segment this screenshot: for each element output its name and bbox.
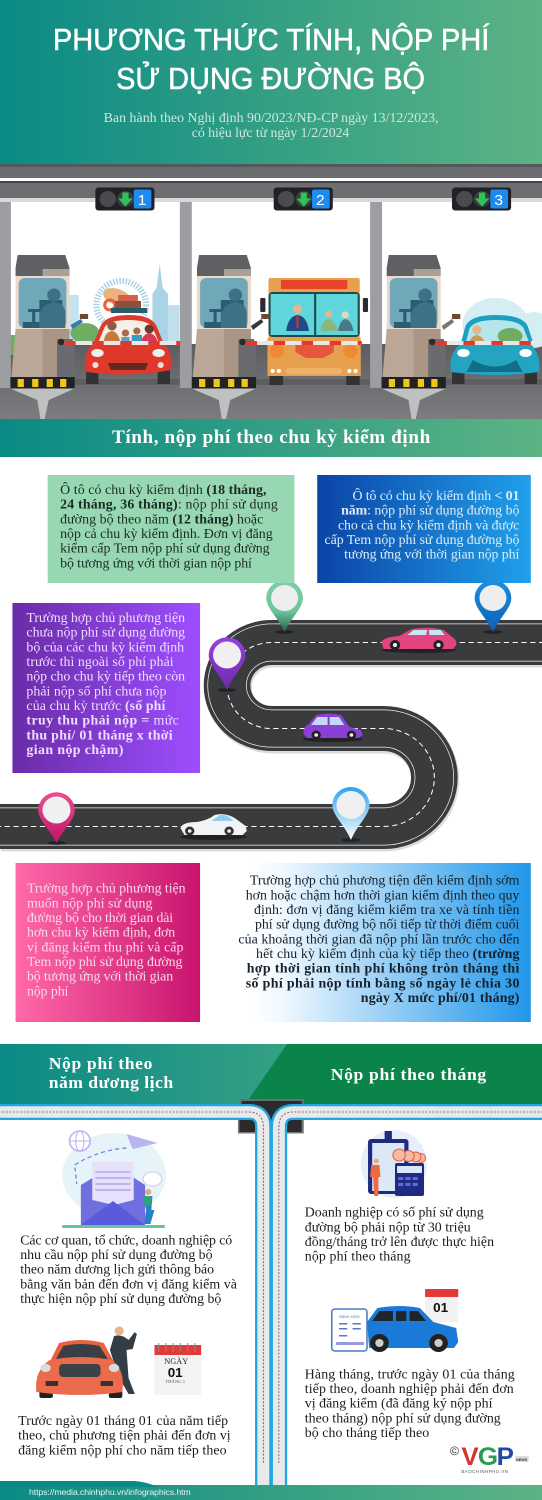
logo: VGP: © [450,1444,459,1458]
panel: pink box: Trường hợp chủ phương tiện [27,881,186,896]
panel: purple arrears box: phải nộp số phí chưa nộp [26,684,167,698]
heading: monthly: Nộp phí theo tháng [331,1065,487,1084]
city background [10,264,542,355]
icon: calendar 1 January: 01 [168,1365,183,1380]
logo: VGP: G [478,1443,498,1471]
panel: early or late inspection box: phí sử dụng đường bộ nối tiếp từ thời điểm cuối [255,917,520,932]
traffic light 3: 3 [494,192,503,209]
panel: purple arrears box: trước thì ngoài số phí phải [26,654,174,669]
panel: green cycle box: nộp cả chu kỳ kiểm định. Đơn vị đăng [60,526,273,541]
red family car [85,285,171,384]
panel: early or late inspection box: hơn hoặc chậm hơn thời gian kiểm định theo quy [246,888,520,902]
panel: pink box: đường bộ cho thời gian dài [27,910,173,925]
panel: early or late inspection box: của khoảng thời gian đã nộp phí lần trước cho đến [238,932,520,946]
panel: early or late inspection box: ngày X mức phí/01 tháng) [361,990,519,1006]
teal car [450,315,539,384]
heading: calendar year [49,1054,174,1092]
icon: blue car with checklist and calendar [332,1289,458,1352]
panel: pink box: hơn chu kỳ kiểm định, đơn [27,925,175,940]
toll booth 2 [192,255,256,419]
panel: blue cycle box: cho cả chu kỳ kiểm định và được [338,518,519,532]
panel: purple arrears box: chưa nộp phí sử dụng đường [26,625,185,640]
panel: purple arrears box: nộp cho chu kỳ tiếp theo còn [26,669,185,684]
panel: early or late inspection box: hợp thời gian tính phí không tròn tháng thì [247,961,520,976]
panel: pink box: Tem nộp phí sử dụng đường [27,954,183,969]
panel: blue cycle box [317,475,531,583]
panel: pink box: bộ tương ứng với thời gian [27,969,173,984]
text: enterprise condition: Doanh nghiệp có số phí sử dụng [305,1205,484,1220]
subtitle: Ban hành theo Nghị định 90/2023/NĐ-CP ngày 13/12/2023, [104,110,439,125]
title: SỬ DỤNG ĐƯỜNG BỘ [116,61,425,96]
text: before 1 January: theo, chủ phương tiện phải đến đơn vị [18,1428,231,1443]
text: enterprise condition: đường bộ phải nộp từ 30 triệu [305,1220,471,1234]
logo: VGP: NEWS [516,1458,528,1462]
pin: light blue [332,787,370,842]
icon: envelope with paper plane [62,1131,166,1228]
section heading bar: Tính, nộp phí theo chu kỳ kiểm định [112,427,431,448]
text: monthly deadline: Hàng tháng, trước ngày 01 của tháng [305,1367,515,1381]
panel: purple arrears box: Trường hợp chủ phương tiện [26,610,185,625]
text: calendar year request: Các cơ quan, tổ chức, doanh nghiệp có [20,1233,232,1247]
columns [0,202,382,388]
text: before 1 January: Trước ngày 01 tháng 01 của năm tiếp [18,1413,228,1428]
panel: pink box [16,863,200,1022]
text: before 1 January [18,1413,231,1457]
text: calendar year request: nhu cầu nộp phí sử dụng đường bộ [20,1247,213,1262]
toll plaza illustration [0,164,542,419]
icon: blue car with checklist and calendar: 01 [433,1300,448,1315]
title: PHƯƠNG THỨC TÍNH, NỘP PHÍ [53,22,490,57]
panel: blue cycle box: cấp Tem nộp phí sử dụng đường bộ [324,532,520,547]
panel: pink box: muốn nộp phí sử dụng [27,896,153,910]
icon: orange car with man [36,1326,137,1398]
panel: pink box: nộp phí [27,984,69,998]
text: monthly deadline: theo tháng) nộp phí sử dụng đường [305,1411,501,1426]
text: enterprise condition [305,1205,494,1264]
panel: purple arrears box: gian nộp chậm) [26,742,123,758]
footer bar [0,1481,542,1500]
icon: calendar 1 January [154,1343,201,1395]
text: monthly deadline: tiếp theo, doanh nghiệp phải đến đơn [305,1381,514,1396]
road [0,642,542,828]
panel: blue cycle box: năm: nộp phí sử dụng đường bộ [341,503,520,518]
traffic light 2: 2 [316,192,325,209]
panel: blue cycle box: Ô tô có chu kỳ kiểm định < 01 [352,487,520,503]
panel: blue cycle box: tương ứng với thời gian nộp phí [344,547,520,562]
pin: purple [209,637,245,692]
logo: VGP: BAOCHINHPHU.VN [461,1469,508,1474]
panel: green cycle box [48,475,294,583]
subtitle [104,110,439,140]
central road divider [0,1099,542,1490]
traffic light 3 [452,188,511,210]
pin: blue [475,580,511,634]
text: calendar year request: theo năm dương lịch gửi thông báo [20,1262,214,1277]
traffic light 2 [274,188,333,210]
panel: purple arrears box: bộ của các chu kỳ kiểm định [26,640,184,654]
panel: green cycle box: đường bộ theo năm (12 tháng) hoặc [60,512,263,527]
panel: early or late inspection box: Trường hợp chủ phương tiện đến kiểm định sớm [250,873,520,888]
panel: early or late inspection box: định: đơn vị đăng kiểm kiểm tra xe và tính tiền [254,902,520,917]
text: monthly deadline: bộ cho tháng tiếp theo [305,1425,429,1440]
panel: early or late inspection box: số phí phải nộp tính bằng số ngày lẻ chia 30 [246,976,520,990]
panel: green cycle box: bộ tương ứng với thời gian nộp phí [60,556,252,570]
pink car [382,628,456,653]
pin: green [266,580,303,634]
header banner [0,0,542,164]
logo: VGP: V [461,1443,479,1471]
panel: pink box: vị đăng kiểm thu phí và cấp [27,940,184,954]
hands holding cards [70,314,460,330]
text: enterprise condition: đồng/tháng trở lên được thực hiện [305,1234,494,1249]
panel: purple arrears box: thu phí/ 01 tháng x thời [26,728,173,742]
barriers [64,341,539,345]
section heading bar [0,419,542,457]
toll booth 1 [10,255,75,419]
panel: early or late inspection box: hết chu kỳ kiểm định của kỳ tiếp theo (trường [256,946,520,962]
panel: green cycle box: Ô tô có chu kỳ kiểm định (18 tháng, [60,481,266,498]
text: enterprise condition: nộp phí theo tháng [305,1249,411,1264]
panel: purple arrears box [12,603,200,773]
icon: clipboard and calculator [361,1130,427,1198]
text: before 1 January: đăng kiểm nộp phí cho năm tiếp theo [18,1443,227,1457]
panel: green cycle box: kiểm cấp Tem nộp phí sử dụng đường [60,541,270,556]
panel: early or late inspection box [238,863,531,1022]
panel: purple arrears box: của chu kỳ trước (số phí [26,698,166,714]
text: monthly deadline [305,1367,515,1440]
white car [180,814,247,840]
text: calendar year request [20,1233,237,1306]
heading: calendar year: Nộp phí theo [49,1054,152,1073]
purple car [303,714,363,742]
logo: VGP: P [497,1443,514,1471]
panel: purple arrears box: truy thu phải nộp = mức [26,713,179,728]
orange bus [260,278,368,385]
panel: green cycle box: 24 tháng, 36 tháng): nộp phí sử dụng [60,497,278,513]
icon: calendar 1 January: THÁNG 1 [165,1379,186,1384]
title [53,22,490,96]
icon: calendar 1 January: NGÀY [164,1356,188,1366]
logo: VGP [450,1443,529,1474]
pin: pink [38,792,75,845]
section headers: calendar year and monthly [0,1044,542,1105]
text: calendar year request: bằng văn bản đến đơn vị đăng kiểm và [20,1277,237,1291]
icon: blue car with checklist and calendar: ĐĂNG KIỂM [339,1314,360,1319]
heading: calendar year: năm dương lịch [49,1073,174,1092]
text: calendar year request: thực hiện nộp phí sử dụng đường bộ [20,1291,222,1306]
text: monthly deadline: vị đăng kiểm (đã đăng ký nộp phí [305,1396,493,1412]
footer bar: https://media.chinhphu.vn/infographics.htm [29,1487,191,1497]
subtitle: có hiệu lực từ ngày 1/2/2024 [192,125,350,140]
traffic light 1: 1 [138,192,146,209]
traffic light 1 [95,188,154,210]
toll booth 3 [382,255,446,419]
